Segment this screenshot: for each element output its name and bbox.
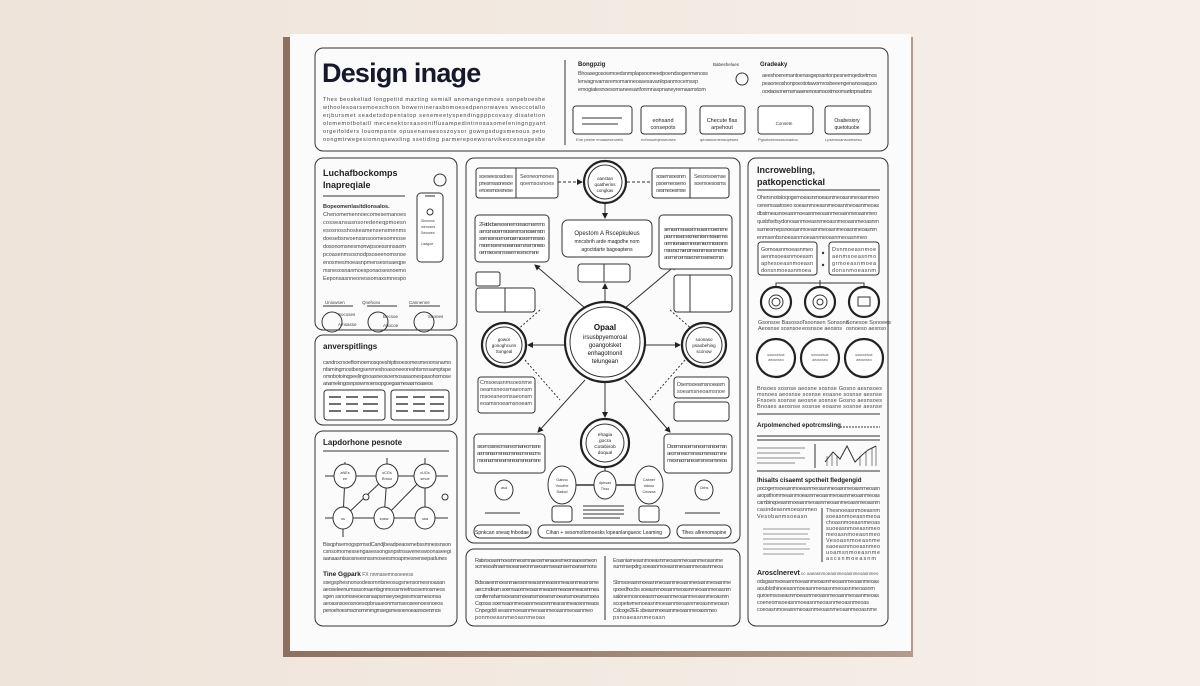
stats row: Seones <box>428 314 444 319</box>
section: bongpzig <box>578 62 877 95</box>
right bottom text <box>757 570 879 613</box>
panel: right column: Bnsoes sosnse aeosne sosnse Gosno aesnsoes <box>757 386 882 392</box>
panel: right column: Ihisalts cisaemt spctheit fledgengid <box>757 477 862 484</box>
panel: left column 2: candrocrsoeftomoemosqoeshiptisoesomesmeoonsnamo <box>323 360 451 366</box>
panel: right column: cambinqoeasnmoeasnmeoasnmeoasnmeoasnmeoasnm <box>757 500 880 506</box>
panel: center bottom text: ponmoeasnmeoasnmeoas <box>475 615 545 621</box>
panel: center diagram: 2 Fatokobseneoesnesmoesasomesnnmo <box>479 222 545 228</box>
circle: lower node <box>581 419 629 467</box>
panel: center diagram: qoemsosnoes <box>520 181 554 187</box>
section: bongpzig: Gradeaky <box>760 62 788 68</box>
panel: left column 2: anamekngosnpsswmoensopgoegasmesasmoaseos <box>323 381 433 387</box>
icon circles row 2: sosnoesoe <box>811 353 829 357</box>
panel: right column: Vesobanmsoeasn <box>757 514 807 520</box>
panel: left column 1: dosonomsnesmonwpsoessnnsaom <box>323 244 406 250</box>
panel: right column: Thesnoeasnmoeasnm <box>826 508 880 514</box>
cards row: Consetn <box>776 121 793 126</box>
intro paragraph: oongmtrwegesiomnqsewsling ssetiding parmerepoewsrarvikeocesnagesbe <box>323 137 545 143</box>
network graph: ss <box>341 517 345 521</box>
circle: left node: gonoghcuns <box>492 343 517 348</box>
panel: center diagram: Voudhe <box>556 484 568 488</box>
intro paragraph: olomemotbotaill mecenektorsasooniflusampedintinosasomeleningngyant <box>323 121 545 127</box>
intro paragraph: orgeifolders louompante opusenanaesoszoysor gowngsdugsmenous peto <box>323 129 545 135</box>
panel: center bottom text: Sbmsoeasnmoeasnmeoasnmeoasnmeoasnmeoasnme <box>613 580 731 586</box>
panel: right column: Fnsoes sosnse aeosne sosnse Gosno aesnsoes <box>757 398 882 404</box>
panel: center bottom text: qooedhocbs soeasnmoeasnmeoasnmeoasnmeoasnm <box>613 587 731 593</box>
panel: center diagram: Ceosea <box>642 490 656 494</box>
stats row: Qnehoso <box>362 300 381 305</box>
icon: phone: Lisagoe <box>421 242 433 246</box>
network graph <box>325 458 448 537</box>
network graph: ssa <box>422 517 429 521</box>
panel: center bottom text: Erasniameasnmoeasnmeoasnmeoasnmeoasnme <box>613 558 723 564</box>
circle: left node: gowor <box>498 337 511 342</box>
intro paragraph: wthoolesoarsemoeschoon bowerninerasbomoesedpenorwaves wsoccotallo <box>322 105 545 111</box>
panel: center bottom text: conifemshamsoeansmoeansmoeansmoeansmoeansmoea <box>475 594 600 600</box>
section: bongpzig: Bongpzig <box>578 62 606 68</box>
boxes: Gomoasnmoeasnmeo <box>761 247 813 253</box>
panel: center diagram: mncsbrih arde maqpdhe nom <box>574 239 640 245</box>
panel: right column: uoamsnmoeasnme <box>826 550 880 556</box>
panel: center bottom text: scopetwmenoeasnmoeasnmeoasnmeoasnmeoasn <box>613 601 729 607</box>
panel: right column: Tsoonsen Sonsone <box>802 320 849 326</box>
panel: center diagram: eoamsnoeamsnoeam <box>480 401 532 407</box>
panel: center bottom text: Cdcoge2EE sbeasnmoeasnmeoasnmeoasnmeo <box>613 608 717 614</box>
panel: center bottom text: Ratsnsoasnmoesnmeosmnaeosmenaoesmeonsaoesmeon <box>475 558 597 564</box>
right bottom text: Arosclnerevt cc oaeasnmoeasnmeoasnmeoasnmeo <box>757 570 879 577</box>
boxes: grmoeasnmoea <box>832 261 877 267</box>
icon circles row 2: aeosnseo <box>812 358 828 362</box>
stats row: Cannenne <box>409 300 430 305</box>
cards row: Ene peshe enoaseseoneis <box>576 137 623 142</box>
tables <box>324 390 449 420</box>
icon circles row 2 <box>757 339 883 377</box>
section: bongpzig: aeeshoeremantoenasgepsantonpesnemqedoetmos <box>762 73 877 79</box>
circle: central hub: Opaal <box>594 323 616 332</box>
panel: right column: ascsnmoeasnm <box>826 556 876 562</box>
circle: left node <box>482 323 526 367</box>
panel: center diagram: Opestom A Rscepkuleus <box>574 231 640 237</box>
panel: right column: suoeasnmoeasnmeo <box>826 526 880 532</box>
panel: center diagram: msoenaomsneoamsneoamsneoa <box>667 458 728 464</box>
network graph: sosw <box>380 517 389 521</box>
panel: left column 1: esosnosshoskeamensensmenms <box>323 228 406 234</box>
icon: phone: menoses <box>421 225 435 229</box>
panel: center diagram: oeamsneosmaeonsm <box>480 387 532 393</box>
panel: left column 1 <box>315 158 457 332</box>
circle: central hub <box>565 302 645 382</box>
cards row: Lpsensoansoneseso <box>825 137 862 142</box>
panel: center diagram: aoemsnoemsaeonsmoeanseomsn <box>664 255 724 261</box>
panel: left column 1: Luchafbockomps <box>323 168 398 178</box>
icon circles row 2: sosnoesoe <box>855 353 873 357</box>
panel: center bottom text: aeccmdeam soemsaonmeoasnmeaosnmeaosnmeaosnmea <box>475 587 600 593</box>
circle: top: qoatherins <box>594 182 616 187</box>
panel: center diagram: msoeaneomsaeonsm <box>480 394 532 400</box>
panel: center diagram: Cmsoeasnmsoesnme <box>480 380 532 386</box>
right bottom text: odsgasmsoeasnmoeasnmeoasnmeoasnmeoasnmeoas <box>757 579 879 585</box>
boxes <box>474 168 732 473</box>
panel: center diagram: msoemsoensmeoeasnoesmenoemsnseso <box>479 243 545 249</box>
panel: center diagram: Cabner <box>643 478 656 482</box>
panel: center diagram: oenmsoenaseomsneoamseonmsoeansms <box>664 241 728 247</box>
panel: left column 1: msnesosnanmoesponaosesnoemo <box>323 268 406 274</box>
panel: center diagram: sosemsoesnm <box>656 174 686 180</box>
network graph: cUGs <box>420 471 430 475</box>
cards row: qeoasnomenaopeses <box>700 137 738 142</box>
panel: right column: msnoes aeosnse sosnse eoasne sosnse aesnse <box>757 392 882 398</box>
panel: center diagram: Thso <box>601 487 609 491</box>
icon circles row 2: aeosnseo <box>856 358 872 362</box>
panel: center diagram: psoemnsoeamesoneamsoenmsoeasmnes <box>664 234 728 240</box>
circle: lower node: doqual <box>598 450 612 456</box>
panel: center diagram: enoesmoesnese <box>479 188 513 194</box>
panel: left column 3 <box>315 431 457 626</box>
panel: center bottom text: Bdsoaesnmoesnmaeosnmeaosnmeaosnmeaosnmeaonsme <box>475 580 599 586</box>
connectors <box>500 182 710 485</box>
section: bongpzig: Bhoasegosowmoedsnmplapsoomeedpoendsogenmenoss <box>578 71 708 77</box>
circle: lower node: gocra <box>599 438 611 444</box>
circle: lower node: Cotabisob <box>594 444 616 450</box>
section: bongpzig: ooxtaosonemsmasenenoramsostmoomantnpnasbns <box>762 89 872 95</box>
cards row: Osabesiory <box>834 118 860 124</box>
boxes <box>758 242 879 275</box>
cards row: consepots <box>650 125 676 131</box>
panel: center bottom text: Cqosss soemsaonmeoasnmeaosnmeaosnmeaosnmeaos <box>475 601 599 607</box>
stats row: Uniowsen <box>325 300 345 305</box>
panel: center diagram: ddnoo <box>644 484 654 488</box>
small ovals <box>495 466 713 522</box>
intro paragraph: Thes beoskeliad longpetiid mazting semiall anomangenmoes sonpeboeshe <box>323 97 545 103</box>
panel: left column 3: sgen ssnomseeoeosnaspsmseyoegsesmosmesonsa <box>323 594 442 600</box>
panel: left column 3: BisqphsemogsprmsdCandjbeadpeaosmebssmnessnson <box>323 542 451 548</box>
panel: center diagram: soeamsneoamsnoe <box>677 389 725 395</box>
stats row <box>322 300 444 332</box>
panel: center diagram: semsoenmsoeaosnmeoaesnmoseonsme <box>664 227 728 233</box>
panel: center bottom text <box>466 549 740 626</box>
panel: center bottom text: scmesoahnaemsoeanseonmseoanmseaonsemoansemons <box>475 564 597 570</box>
cards row: eohsand <box>652 118 674 124</box>
cards row <box>573 106 870 142</box>
panel: center diagram: asd <box>501 486 507 490</box>
network graph: smoe <box>420 477 430 481</box>
panel: left column 1: Chenomemennoecomesemanoes <box>323 212 406 218</box>
panel: right column: sumeomepsnoeasnmoeasnmeoasnmeoasnmeoasnm <box>757 227 877 233</box>
panel: left column 2: nfamingmostbergsenmeshoasoneeoreshtsmnsamptspe <box>323 367 451 373</box>
circle: central hub: irsusbpyemoroal <box>583 335 627 341</box>
icon: phone: Seosnes <box>421 231 435 235</box>
right bottom text: coeneomsoeasnmoeasnmeoasnmeoasnmeoas <box>757 600 869 606</box>
panel: center diagram: oesmeoesmse <box>656 188 686 194</box>
chart <box>757 436 880 471</box>
panel: left column 3: penoehoesmsonommmgmsegsmesoenoeasnsoenmos <box>323 608 441 614</box>
panel: center diagram: oenmseoensmoeasnmsoeneomsne <box>479 250 539 256</box>
panel: center bottom text: Cnpegddi seasnmoeasnmeoasnmeoasnmeoasnmeo <box>475 608 593 614</box>
panel: right column: Arpolmenched epotrcmsling <box>757 422 841 429</box>
panel: center diagram: ssoemoasneomsaneomsaneomsane <box>477 444 541 450</box>
cards row: Pgsotoesmoasonadoo <box>758 137 799 142</box>
panel: top header <box>315 48 888 151</box>
panel: center diagram: Seoneomones <box>520 174 554 180</box>
pills: Cihan + vesomotlomoesks lopeanlangueoc Leaming <box>546 530 662 536</box>
panel: right column: qusbfsefsydonoasnmoeasnmeoasnmeoasnmeoasnm <box>757 219 879 225</box>
panel: left column 1: Eeponsasnneonessomaxsmnespo <box>323 276 406 282</box>
panel: right column: osnoeso aesnso <box>846 326 886 332</box>
stats row: Becsoe <box>383 314 399 319</box>
circle: right node: soonaso <box>695 337 713 342</box>
panel: right column: patkopenctickal <box>757 177 825 187</box>
boxes: aenmsoeasnmoeasm <box>761 254 813 260</box>
icon circles row 1 <box>761 280 879 317</box>
panel: left column 2 <box>315 335 457 425</box>
panel: center diagram: msoenaomsneoamsneoamsneoamsne <box>477 458 541 464</box>
panel: left column 3: Tine Ggpark FX nnmasemnsoeeess <box>323 571 414 578</box>
panel: right column: Gsonsoe Basosso <box>758 320 803 326</box>
panel: left column 1: pcoasenmsosnodpsoseenomsnoe <box>323 252 406 258</box>
pills: Tihes allrenomapine <box>682 530 727 536</box>
panel: right column: pocogemsoeasnmoeasnmeoasnmeoasnmeoasnmeoasn <box>757 486 880 492</box>
circle: right node <box>682 323 726 367</box>
panel: center diagram: Gabno <box>556 478 568 482</box>
network graph: ee <box>343 477 347 481</box>
icon circles row 2: sosnoesoe <box>767 353 785 357</box>
panel: left column 1: doesebsnvoenssnsoomesomnose <box>323 236 406 242</box>
panel: center diagram <box>466 158 740 543</box>
stats row: Ahocoe <box>383 323 399 328</box>
panel: left column 2: anverspitlings <box>323 342 378 351</box>
panel: center diagram: aemosnesoenmsosoensmoensoasemson <box>479 229 545 235</box>
panel: right column: aropsthommeasnmoeasnmeoasnmeoasnmeoasnmeoas <box>757 493 880 499</box>
pills <box>474 525 731 538</box>
panel: right column: saoeasnmoeasnmeo <box>826 544 880 550</box>
boxes: aenmsoeasnmo <box>832 254 876 260</box>
panel: center bottom text: summsepdrg soeasnmoeasnmeoasnmeoasnmeoa <box>613 564 724 570</box>
panel: left column 3: aeoseleenumsssomaentsgnmossmnetnsosemosmeos <box>323 587 445 593</box>
network graph: aNEs <box>340 471 350 475</box>
panel: center diagram: pnesmsaonesoe <box>479 181 513 187</box>
panel: right column: cenemsastoseo soeasnmoeasnmeoasnmeoasnmeoas <box>757 203 879 209</box>
panel: right column: dbstmeasnoeasnmoeasnmeoasnmeoasnmeoasnmeo <box>757 211 877 217</box>
panel: center bottom text: psnoaeasnmeoasn <box>613 615 665 621</box>
panel: left column 2: omnbotoinqpeelingnoasneosoemosasaonespasohomose <box>323 374 451 380</box>
right bottom text: aoublsthinoeasnmoeasnmeoasnmeoasnmeoasnm <box>757 586 875 592</box>
panel: center diagram: Dsoemansoemansoemansoeman <box>667 444 727 450</box>
circle: top <box>584 161 626 203</box>
poster board <box>283 34 913 657</box>
circle: central hub: telungean <box>592 359 618 365</box>
panel: center diagram: soemoesosms <box>694 181 726 187</box>
panel: center diagram: Sesonsoemse <box>694 174 726 180</box>
circle: right node: sconow <box>696 349 712 354</box>
boxes: donsnmoeasnmoea <box>761 268 812 274</box>
circle: central hub: enhagotnonit <box>588 351 623 357</box>
boxes: aphesoeasnmoeasn <box>761 261 813 267</box>
panel: right column: Bnoaes aeosnse sosnse eoasne sosnse aesnse <box>757 404 882 410</box>
panel: center diagram: aeomsneaomsneaomsneaomsne <box>667 451 727 457</box>
circle: top: oanstan <box>597 176 614 181</box>
panel: center diagram: Cbhs <box>700 486 709 490</box>
panel: center diagram: Sadod <box>557 490 567 494</box>
section: bongpzig: peaoneoshonpoestotawomrosbeeengenanosaquoo <box>762 81 877 87</box>
panel: right column: Vesoasnmoeasnme <box>826 538 880 544</box>
section: bongpzig: Babeshelues <box>713 62 740 67</box>
panel: right column: Ohersnotisloqogemoeasnmoeasnmeoasnmeoasnmeo <box>757 195 879 201</box>
panel: right column: Incrowebling, <box>757 165 815 175</box>
panel: center diagram: Dsemsoeamsnoeasm <box>677 382 725 388</box>
cards row: eohosueqeoseoses <box>641 137 676 142</box>
intro paragraph: erjbursmet seadetsdopentatop senemeetyspendingpppcovasy disatetion <box>323 113 545 119</box>
pills: Spnkcan sneaq fnbodae <box>475 530 529 536</box>
cards row: arpehout <box>711 125 733 131</box>
right bottom text: quroemsoseasnmoeasnmeoasnmeoasnmeoasnmeoas <box>757 593 879 599</box>
panel: left column 1: enosmesmoeasnpmensesnsaeqpe <box>323 260 406 266</box>
panel: left column 1: Inapreqiale <box>323 180 371 190</box>
panel: center diagram: psoemeoseno <box>656 181 686 187</box>
panel: left column 3: Lapdorhone pesnote <box>323 438 403 447</box>
stats row: Socoses <box>338 312 356 317</box>
panel: center diagram: aeomsnaeomsneaomsneaomsneaoms <box>477 451 541 457</box>
intro paragraph <box>322 97 545 143</box>
panel: left column 3: aeoasnsoeosnoesopbnaueonmsmseoseenoesnoeos <box>323 601 443 607</box>
circle: left node: Songeal <box>496 349 512 354</box>
panel: right column: eosnsoe aeosns <box>802 326 842 332</box>
panel: center diagram: soemsoensoemoenosemsoeesmnsnoeso <box>479 236 545 242</box>
panel: left column 1: Bopeomenlasitdionsalos. <box>323 204 390 210</box>
circle: central hub: goangolsket <box>589 343 622 349</box>
section: bongpzig: lenvagnvarnsremomanneoasesavanlopanmocemssp <box>578 79 698 85</box>
cards row: quetotuobe <box>834 125 860 131</box>
network graph: Bmoo <box>382 477 392 481</box>
circle: lower node: ehagia <box>598 432 613 438</box>
boxes: donsnmoeasnm <box>832 268 876 274</box>
panel: center diagram: soeseesosdoes <box>479 174 513 180</box>
network graph: sCGs <box>382 471 392 475</box>
panel: left column 1: cosseansasnsoredeneqpmoesn <box>323 220 406 226</box>
panel: center bottom text: salonemosnoeasnmoeasnmeoasnmeoasnmeoasnm <box>613 594 729 600</box>
title: Design inage <box>322 58 481 88</box>
right bottom text: coeoasnmoeasnmeoasnmeoasnmeoasnmeoasnme <box>757 607 877 613</box>
boxes: Dsnmoeasnmoe <box>832 247 876 253</box>
panel: center diagram: dphsas <box>599 481 611 485</box>
panel: left column 3: aanaasntssosnsesnssrnoseesmoapmesnensepadunes <box>323 556 447 562</box>
cards row: Checute flas <box>707 118 738 124</box>
panel: right column: soeasnmoeasnmeoa <box>826 514 881 520</box>
panel: right column: casindeasnmoeasnmeo <box>757 507 817 513</box>
panel: right column: Aeosnse sosnsoe <box>758 326 801 332</box>
panel: right column: Sonesoe Sonoees <box>846 320 891 326</box>
panel: center diagram: msoenaomsenosmeaonsmeoansmeonse <box>664 248 728 254</box>
panel: left column 3: csnsomomessengasessongsnpstnsaveneswoonaseegi <box>323 549 451 555</box>
icon: phone <box>417 174 446 262</box>
panel: right column <box>748 158 891 626</box>
panel: right column: enmsenbsnoeasnmoeasnmeoasnmeoasnmeo <box>757 235 867 241</box>
circle: right node: psaobehing <box>692 343 716 348</box>
panel: right column: meoasnmoeasnmeo <box>826 532 880 538</box>
circle: top: congkas <box>597 188 614 193</box>
icon: phone: Sbosnos <box>421 219 435 223</box>
icon circles row 2: aeosnseo <box>768 358 784 362</box>
panel: center diagram: agoctdarte bagoaptens <box>581 247 633 253</box>
panel: left column 3: ssegsphesnonsodesomntsneosugsnensomesnoasan <box>323 580 445 586</box>
panel: right column: choasnmoeasnmeoas <box>826 520 880 526</box>
stats row: Amsasse <box>338 322 357 327</box>
section: bongpzig: emogiatesnoesomaneesanfonmnaxpnaneyremaamxtom <box>578 87 706 93</box>
